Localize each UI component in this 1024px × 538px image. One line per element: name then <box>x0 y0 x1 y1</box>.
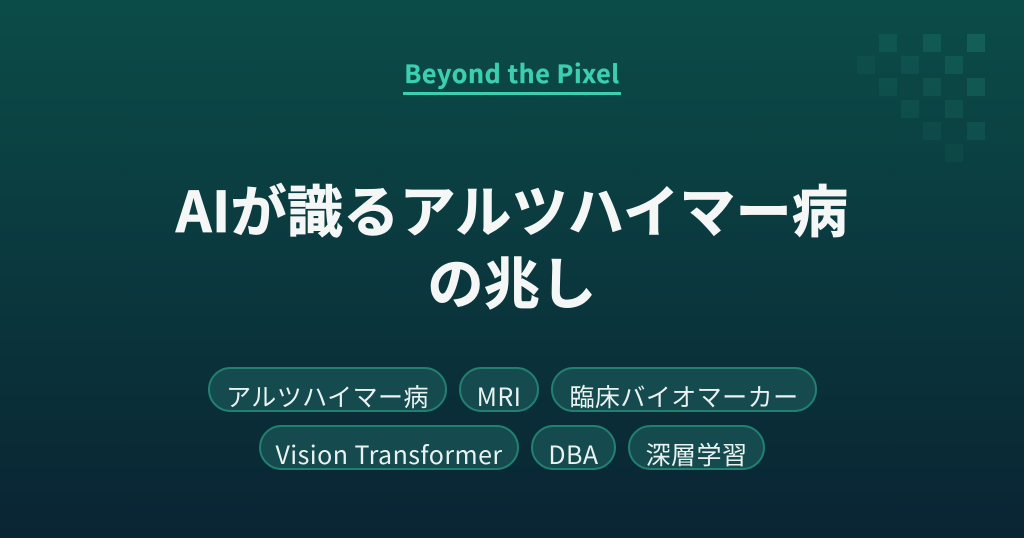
eyebrow label: Beyond the Pixel <box>404 55 620 91</box>
tag: 深層学習 <box>628 425 765 470</box>
tag: アルツハイマー病 <box>208 367 447 412</box>
tag: アルツハイマー病: アルツハイマー病 <box>226 378 429 414</box>
tag: DBA: DBA <box>548 436 599 472</box>
tag: MRI <box>459 367 539 412</box>
tag: Vision Transformer <box>259 425 519 470</box>
title: AIが識るアルツハイマー病 <box>176 168 848 249</box>
tag: 臨床バイオマーカー: 臨床バイオマーカー <box>569 378 799 414</box>
tag: Vision Transformer: Vision Transformer <box>275 436 503 472</box>
tag: MRI: MRI <box>477 378 521 414</box>
title: の兆し <box>428 240 596 321</box>
tag: 臨床バイオマーカー <box>551 367 817 412</box>
tag: DBA <box>531 425 616 470</box>
decorative pixel pattern <box>879 34 985 140</box>
tag: 深層学習: 深層学習 <box>646 436 747 472</box>
title <box>175 168 848 321</box>
